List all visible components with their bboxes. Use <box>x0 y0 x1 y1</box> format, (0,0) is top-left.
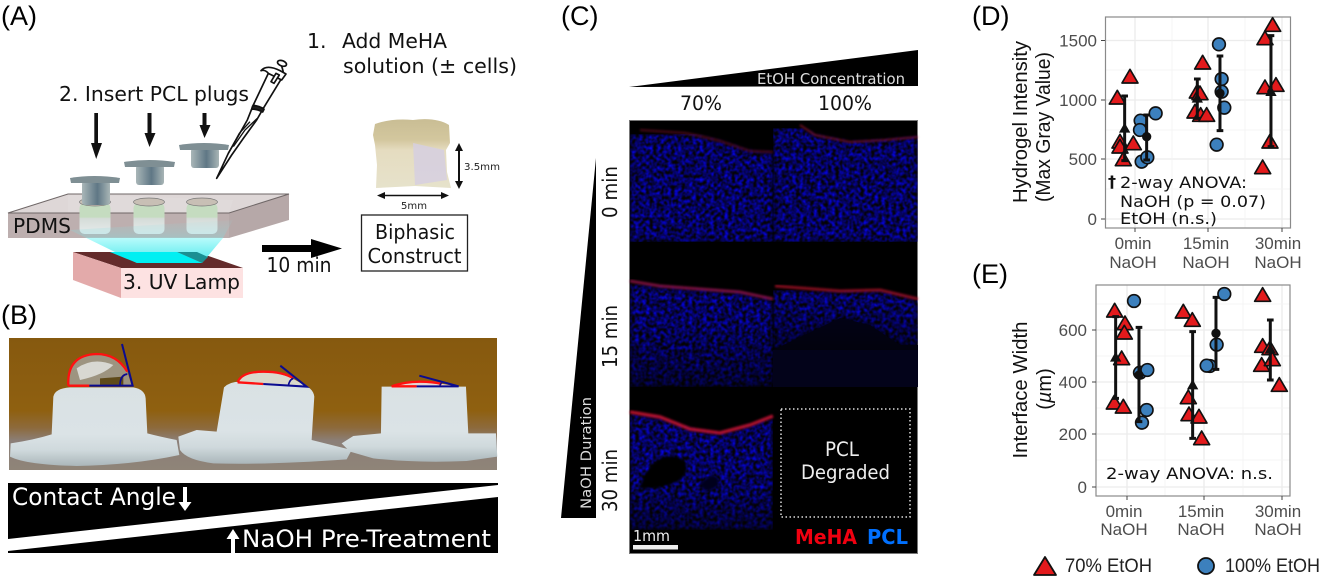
UV lamp <box>73 252 243 298</box>
stain legend <box>795 525 908 549</box>
row label 30 min: 30 min <box>598 449 622 512</box>
wedge: NaOH pre-treatment: NaOH Pre-Treatment <box>242 525 491 553</box>
UV light beam <box>70 220 233 263</box>
stain legend: PCL <box>867 525 908 549</box>
legend <box>1034 555 1320 576</box>
chart E x tick labels: 30min <box>1255 502 1301 521</box>
arrows: insert plugs <box>91 113 210 159</box>
chart D y tick labels: 500 <box>1069 150 1097 169</box>
plug 2 <box>178 382 352 464</box>
biphasic construct box: Biphasic <box>375 220 455 244</box>
chart E x tick labels: 15min <box>1178 502 1224 521</box>
chart D x tick labels: 30min <box>1255 234 1301 253</box>
chart E y tick labels: 600 <box>1059 321 1087 340</box>
step 1 text: solution (± cells) <box>343 54 517 78</box>
chart E x tick labels <box>1100 502 1302 539</box>
chart D y axis title: Hydrogel Intensity <box>1010 41 1032 203</box>
chart D x tick labels: 15min <box>1183 234 1229 253</box>
panel E label: (E) <box>972 259 1008 289</box>
chart D y tick labels <box>1059 32 1097 229</box>
droplet 1 <box>68 344 133 386</box>
chart D grid and frame <box>1101 17 1290 232</box>
biphasic construct box <box>362 215 468 271</box>
chart D x tick labels: 0min <box>1115 234 1151 253</box>
chart E y axis title: (µm) <box>1034 368 1056 410</box>
chart D x tick labels: NaOH <box>1109 253 1157 272</box>
wells <box>80 198 218 234</box>
biphasic construct box: Construct <box>368 244 462 268</box>
panel D label: (D) <box>972 1 1009 31</box>
micrograph 15 min <box>630 281 918 387</box>
chart E y tick labels: 400 <box>1059 373 1087 392</box>
panel C label: (C) <box>561 1 598 31</box>
plug 1 <box>10 387 179 466</box>
chart D ANOVA note: EtOH (n.s.) <box>1120 209 1217 228</box>
panel A: fabrication schematic <box>8 29 517 298</box>
chart E x tick labels: NaOH <box>1100 520 1148 539</box>
PDMS slab <box>8 194 289 238</box>
construct photo with dimensions: 5mm <box>401 201 427 212</box>
chart D y tick labels: 0 <box>1088 210 1097 229</box>
UV lamp label: 3. UV Lamp <box>123 270 240 294</box>
step 1 text: 1. <box>307 29 327 53</box>
droplet 3 <box>392 376 459 386</box>
wedge: contact angle: Contact Angle <box>12 483 176 511</box>
panel A label: (A) <box>1 1 37 31</box>
PDMS label: PDMS <box>13 214 71 238</box>
PCL degraded box <box>781 409 910 517</box>
wedge: NaOH pre-treatment <box>8 497 498 553</box>
chart D x tick labels: NaOH <box>1182 253 1230 272</box>
panel B: contact angle photo <box>9 338 497 470</box>
chart D ANOVA note: † <box>1108 172 1116 191</box>
chart D x tick labels <box>1109 234 1302 272</box>
chart E y tick labels: 0 <box>1078 478 1087 497</box>
row label 15 min: 15 min <box>598 305 622 368</box>
chart D data points <box>1109 18 1284 174</box>
chart D y axis title: (Max Gray Value) <box>1033 52 1055 202</box>
PCL degraded box: PCL <box>825 438 859 461</box>
chart E y tick labels <box>1059 321 1087 497</box>
step 2 text: 2. Insert PCL plugs <box>59 82 249 106</box>
scale bar <box>633 527 678 550</box>
stain legend: MeHA <box>795 525 857 549</box>
row label 0 min: 0 min <box>598 166 622 218</box>
wedge: EtOH concentration: EtOH Concentration <box>757 70 905 88</box>
chart D: hydrogel intensity <box>1010 17 1302 272</box>
chart E y axis title: Interface Width <box>1010 322 1032 458</box>
chart D ANOVA note: NaOH (p = 0.07) <box>1120 192 1266 211</box>
scale bar: 1mm <box>633 527 670 545</box>
chart E data points <box>1106 288 1287 445</box>
panel B label: (B) <box>1 300 37 330</box>
chart E y axis title <box>1010 322 1056 458</box>
chart D error bars <box>1119 36 1277 161</box>
micrograph 30 min <box>630 412 773 530</box>
step 1 text: Add MeHA <box>342 29 447 53</box>
chart D y tick labels: 1500 <box>1059 32 1097 50</box>
chart D y tick labels: 1000 <box>1059 91 1097 110</box>
wedge: NaOH duration: NaOH Duration <box>579 397 595 509</box>
chart D y axis title <box>1010 41 1055 203</box>
10 min label: 10 min <box>266 253 332 277</box>
PCL plugs <box>70 143 229 205</box>
PCL degraded box: Degraded <box>801 461 890 484</box>
wedge: contact angle <box>8 483 498 539</box>
panel C: fluorescence micrographs <box>630 120 918 554</box>
chart E: interface width <box>1010 285 1302 539</box>
column label 70%: 70% <box>680 92 722 115</box>
step 1 text <box>307 29 517 78</box>
icon: pipette <box>217 59 287 178</box>
chart E x tick labels: NaOH <box>1177 520 1225 539</box>
chart E error bars <box>1110 297 1276 438</box>
wedge: EtOH concentration <box>629 50 918 88</box>
chart E x tick labels: NaOH <box>1254 520 1302 539</box>
chart E y tick labels: 200 <box>1059 425 1087 444</box>
wedge: NaOH duration <box>561 158 596 518</box>
construct photo with dimensions <box>373 119 500 212</box>
chart E x tick labels: 0min <box>1106 502 1142 521</box>
chart E grid and frame <box>1092 285 1290 500</box>
chart D ANOVA note <box>1108 172 1266 228</box>
column label 100%: 100% <box>818 92 872 115</box>
plug 3 <box>342 387 497 462</box>
construct photo with dimensions: 3.5mm <box>464 162 500 173</box>
chart D x tick labels: NaOH <box>1254 253 1302 272</box>
droplet 2 <box>238 366 307 387</box>
chart D ANOVA note: 2-way ANOVA: <box>1120 173 1247 192</box>
chart E ANOVA note: 2-way ANOVA: n.s. <box>1106 464 1273 483</box>
micrograph 0 min <box>630 125 918 242</box>
arrow: 10 min <box>262 239 342 258</box>
